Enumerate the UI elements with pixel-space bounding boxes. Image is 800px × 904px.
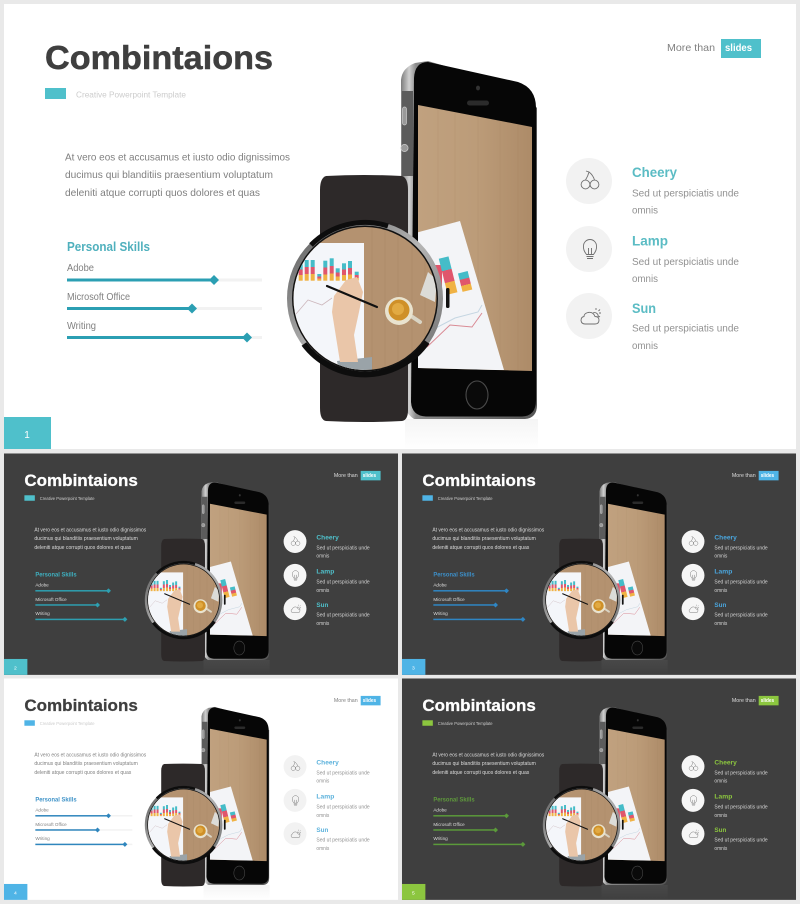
feature: sun: omnis [714,846,728,852]
feature: cheery [284,530,370,560]
feature: cheery [284,755,370,785]
feature: sun: Sun [316,827,328,834]
feature: sun: Sed ut perspiciatis unde [714,613,768,619]
feature: lamp: Lamp [316,794,334,801]
more than slides tag: More than [732,473,756,479]
intro paragraph [432,752,545,776]
subtitle with accent swatch: Creative Powerpoint Template [76,90,186,100]
feature: lamp: omnis [632,273,658,285]
intro paragraph: At vero eos et accusamus et iusto odio dignissimos [34,527,147,533]
personal skills chart: Microsoft Office [433,597,465,603]
feature: cheery: Sed ut perspiciatis unde [316,770,370,776]
page number tab [4,659,27,675]
icon: cherries [581,171,599,189]
feature: lamp [284,564,370,594]
feature: cheery [566,158,739,216]
intro paragraph: At vero eos et accusamus et iusto odio dignissimos [34,752,147,758]
phone and watch illustration [542,707,668,900]
page number tab: 5 [412,890,415,896]
more than slides tag: slides [761,473,774,479]
personal skills chart: Microsoft Office [35,597,67,603]
page number tab: 1 [24,430,30,441]
page number tab [4,417,51,449]
personal skills chart [35,571,127,622]
feature: cheery: Cheery [632,165,677,180]
subtitle with accent swatch: Creative Powerpoint Template [40,721,95,726]
feature: cheery: omnis [714,554,728,560]
intro paragraph [65,152,290,199]
personal skills chart [35,796,132,847]
subtitle with accent swatch: Creative Powerpoint Template [438,721,493,726]
page number tab: 2 [14,665,17,671]
phone and watch illustration [285,61,538,449]
personal skills chart: Writing [433,836,448,842]
feature: sun [284,597,370,627]
panel: dark blue slide [402,453,796,675]
personal skills chart: Personal Skills [67,240,150,254]
feature: cheery: omnis [316,779,330,785]
panel: dark green slide [402,678,796,900]
subtitle with accent swatch [45,88,186,100]
more than slides tag: More than [334,698,358,704]
feature: sun [284,822,370,852]
intro paragraph: ducimus qui blanditiis praesentium voluptatum [432,536,536,542]
phone [401,61,537,419]
feature: sun: Sun [316,602,328,609]
feature: sun: omnis [316,846,330,852]
more than slides tag: slides [725,42,752,54]
personal skills chart: Adobe [433,807,447,813]
feature: sun [566,293,739,352]
feature: cheery [682,530,768,560]
feature: sun: Sed ut perspiciatis unde [316,613,370,619]
subtitle with accent swatch: Creative Powerpoint Template [40,496,95,501]
feature: lamp: Sed ut perspiciatis unde [714,579,768,585]
panel: main slide teal [4,4,796,449]
feature: lamp: Sed ut perspiciatis unde [316,579,370,585]
feature: lamp: omnis [714,588,728,594]
feature: cheery: Sed ut perspiciatis unde [714,545,768,551]
feature: lamp: Sed ut perspiciatis unde [714,804,768,810]
feature: lamp: Lamp [632,234,668,249]
more than slides tag [732,471,779,480]
feature: lamp: Lamp [714,569,732,576]
feature: lamp: Lamp [316,569,334,576]
feature: lamp: Sed ut perspiciatis unde [632,256,739,268]
personal skills chart: Writing [67,321,96,332]
feature: sun: Sun [714,602,726,609]
page number tab [4,884,27,900]
feature: cheery: Sed ut perspiciatis unde [316,545,370,551]
more than slides tag [732,696,779,705]
subtitle with accent swatch: Creative Powerpoint Template [438,496,493,501]
more than slides tag: slides [761,698,774,704]
feature: lamp: Lamp [714,794,732,801]
intro paragraph: At vero eos et accusamus et iusto odio dignissimos [432,527,545,533]
personal skills chart [433,796,525,847]
title: Combintaions [24,697,138,715]
intro paragraph [432,527,545,551]
icon: light bulb [583,240,597,258]
more than slides tag: More than [732,698,756,704]
icon: sun and cloud [581,308,601,324]
more than slides tag [334,696,381,705]
feature: lamp [566,226,739,285]
feature: cheery: Cheery [714,535,737,542]
personal skills chart: Writing [35,611,50,617]
more than slides tag: More than [667,42,715,54]
personal skills chart: Adobe [35,807,49,813]
intro paragraph: ducimus qui blanditiis praesentium voluptatum [34,761,138,767]
phone reflection [405,419,538,449]
feature: cheery: Cheery [714,760,737,767]
page number tab: 4 [14,890,17,896]
intro paragraph: deleniti atque corrupti quos dolores et quas [34,545,132,551]
personal skills chart: Microsoft Office [67,292,130,303]
more than slides tag [334,471,381,480]
page number tab [402,659,425,675]
title: Combintaions [45,39,273,76]
personal skills chart: Microsoft Office [433,822,465,828]
feature: sun [682,822,768,852]
personal skills chart: Personal Skills [35,796,77,803]
personal skills chart: Adobe [67,263,94,274]
feature: cheery [682,755,768,785]
intro paragraph: deleniti atque corrupti quos dolores et quas [432,545,530,551]
feature: sun: Sed ut perspiciatis unde [632,323,739,335]
phone and watch illustration [144,707,270,900]
feature: sun: Sun [714,827,726,834]
subtitle with accent swatch [24,495,95,501]
intro paragraph: ducimus qui blanditiis praesentium voluptatum [34,536,138,542]
phone and watch illustration [144,482,270,675]
feature: sun: omnis [632,340,658,352]
intro paragraph [34,527,147,551]
feature: lamp [284,789,370,819]
page number tab [402,884,425,900]
intro paragraph: deleniti atque corrupti quos dolores et quas [34,770,132,776]
subtitle with accent swatch [422,495,493,501]
phone and watch illustration [542,482,668,675]
intro paragraph: ducimus qui blanditiis praesentium voluptatum [432,761,536,767]
panel: white blue slide [4,678,398,900]
intro paragraph: ducimus qui blanditiis praesentium voluptatum [65,169,273,181]
feature: lamp: Sed ut perspiciatis unde [316,804,370,810]
feature: sun: Sed ut perspiciatis unde [714,838,768,844]
more than slides tag: slides [363,473,376,479]
feature: sun [682,597,768,627]
feature: cheery: omnis [316,554,330,560]
more than slides tag [667,39,761,58]
feature: cheery: omnis [714,779,728,785]
personal skills chart: Adobe [433,582,447,588]
feature: sun: Sun [632,301,656,316]
personal skills chart: Personal Skills [35,571,77,578]
feature: sun: omnis [714,621,728,627]
intro paragraph [34,752,147,776]
feature: lamp: omnis [316,588,330,594]
subtitle with accent swatch [422,720,493,726]
title: Combintaions [422,697,536,715]
intro paragraph: deleniti atque corrupti quos dolores et quas [432,770,530,776]
personal skills chart: Writing [433,611,448,617]
feature: cheery: Cheery [316,760,339,767]
feature: lamp [682,789,768,819]
personal skills chart: Personal Skills [433,571,475,578]
feature: lamp: omnis [316,813,330,819]
feature: sun: Sed ut perspiciatis unde [316,838,370,844]
feature: sun: omnis [316,621,330,627]
more than slides tag: slides [363,698,376,704]
more than slides tag: More than [334,473,358,479]
feature: cheery: Sed ut perspiciatis unde [632,188,739,200]
feature: cheery: omnis [632,204,658,216]
personal skills chart [67,240,262,342]
feature: lamp [682,564,768,594]
personal skills chart: Personal Skills [433,796,475,803]
personal skills chart: Writing [35,836,50,842]
intro paragraph: deleniti atque corrupti quos dolores et quas [65,187,260,199]
intro paragraph: At vero eos et accusamus et iusto odio dignissimos [65,152,290,164]
intro paragraph: At vero eos et accusamus et iusto odio dignissimos [432,752,545,758]
personal skills chart: Adobe [35,582,49,588]
watch [285,175,450,422]
feature: lamp: omnis [714,813,728,819]
feature: cheery: Sed ut perspiciatis unde [714,770,768,776]
personal skills chart [433,571,525,622]
subtitle with accent swatch [24,720,95,726]
panel: dark teal slide [4,453,398,675]
title: Combintaions [422,472,536,490]
personal skills chart: Microsoft Office [35,822,67,828]
page number tab: 3 [412,665,415,671]
feature: cheery: Cheery [316,535,339,542]
title: Combintaions [24,472,138,490]
